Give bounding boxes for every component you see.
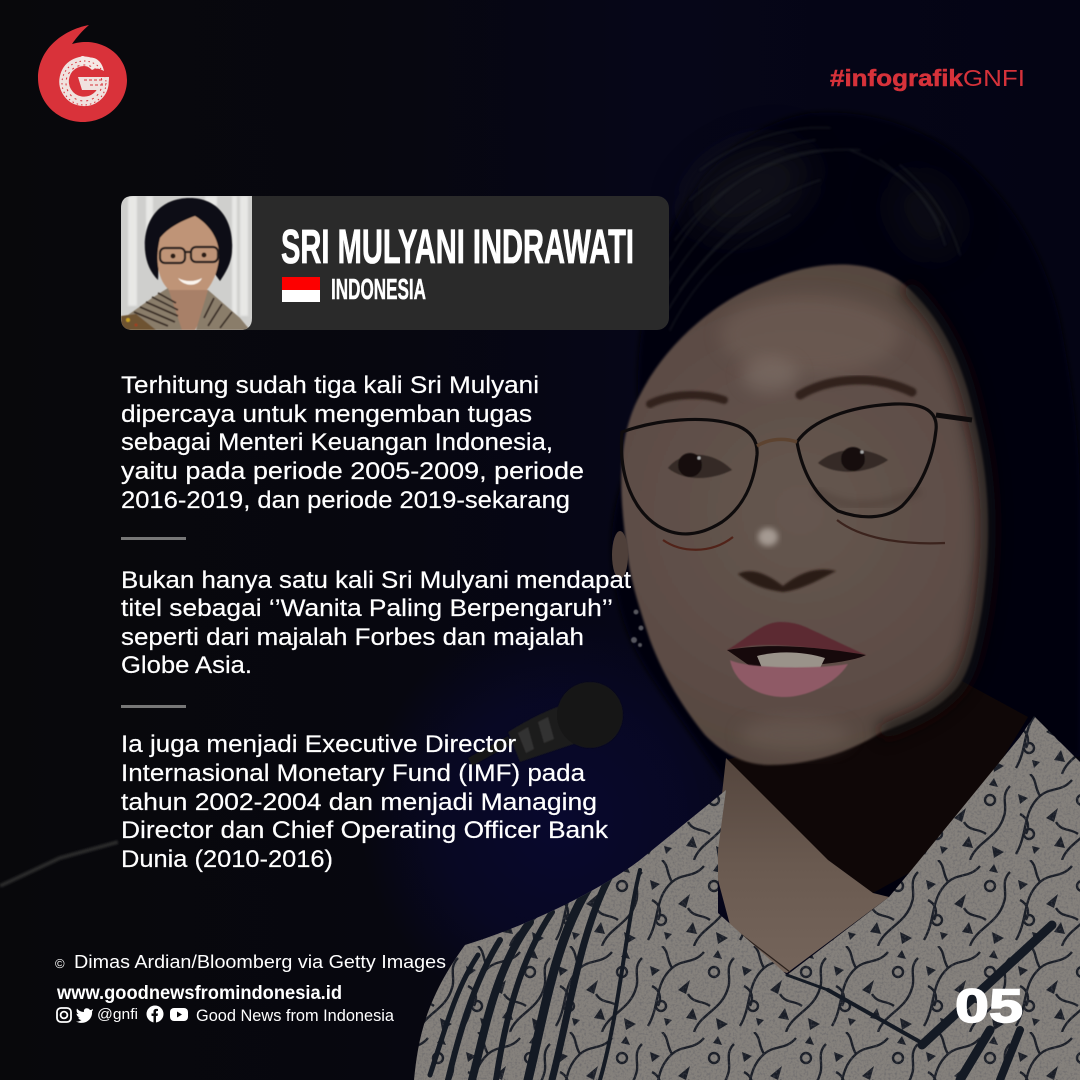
eyebrows	[650, 380, 912, 404]
logo emblem	[62, 56, 109, 105]
text block: paragraph 1	[121, 372, 584, 514]
text block: paragraph 3	[121, 731, 609, 873]
text block: paragraph 1: yaitu pada periode 2005-2009, periode	[121, 458, 584, 485]
eyes	[668, 447, 888, 478]
text block: paragraph 2	[121, 567, 631, 679]
text block: paragraph 1: dipercaya untuk mengemban tugas	[121, 401, 532, 428]
icon: twitter	[76, 1008, 93, 1023]
text block: paragraph 3: Director dan Chief Operating Officer Bank	[121, 817, 609, 844]
jacket	[414, 716, 1080, 1080]
text block: paragraph 1: sebagai Menteri Keuangan Indonesia,	[121, 429, 553, 456]
panel: name card	[121, 196, 669, 330]
icon: instagram	[57, 1008, 71, 1022]
name: SRI MULYANI INDRAWATI	[281, 221, 634, 274]
text block: paragraph 3: Dunia (2010-2016)	[121, 846, 333, 873]
page number: 05	[955, 979, 1023, 1032]
website: www.goodnewsfromindonesia.id	[56, 983, 342, 1004]
text block: paragraph 3: Internasional Monetary Fund (IMF) pada	[121, 760, 586, 787]
social row	[57, 1006, 395, 1025]
hashtag: #infografik GNFI	[830, 65, 1025, 91]
text block: paragraph 3: Ia juga menjadi Executive Director	[121, 731, 516, 758]
icon: youtube	[170, 1008, 188, 1021]
microphone	[470, 682, 623, 762]
photo credit: ©	[55, 956, 65, 971]
hair	[612, 112, 1080, 940]
icon: facebook	[146, 1006, 164, 1023]
text block: paragraph 2: titel sebagai ‘’Wanita Paling Berpengaruh’’	[121, 595, 613, 622]
microphone left background	[0, 842, 118, 886]
text block: paragraph 2: seperti dari majalah Forbes dan majalah	[121, 624, 584, 651]
neck shadow	[726, 680, 1028, 893]
nose	[738, 528, 836, 592]
country: INDONESIA	[331, 274, 426, 306]
text block: paragraph 1: 2016-2019, dan periode 2019-sekarang	[121, 487, 570, 514]
photo credit: Dimas Ardian/Bloomberg via Getty Images	[74, 952, 446, 972]
text block: paragraph 1: Terhitung sudah tiga kali Sri Mulyani	[121, 372, 539, 399]
jacket stripes	[430, 870, 1052, 1080]
face	[612, 264, 988, 765]
logo	[38, 25, 127, 122]
flag	[282, 277, 320, 302]
handle: @gnfi	[97, 1006, 138, 1023]
text block: paragraph 2: Bukan hanya satu kali Sri Mulyani mendapat	[121, 567, 631, 594]
mouth	[727, 622, 866, 697]
text block: paragraph 3: tahun 2002-2004 dan menjadi Managing	[121, 789, 597, 816]
page name: Good News from Indonesia	[196, 1006, 395, 1025]
glasses	[621, 404, 972, 550]
portrait photo	[121, 196, 252, 330]
neck	[716, 758, 889, 973]
ear and earring	[612, 531, 644, 647]
text block: paragraph 2: Globe Asia.	[121, 652, 252, 679]
